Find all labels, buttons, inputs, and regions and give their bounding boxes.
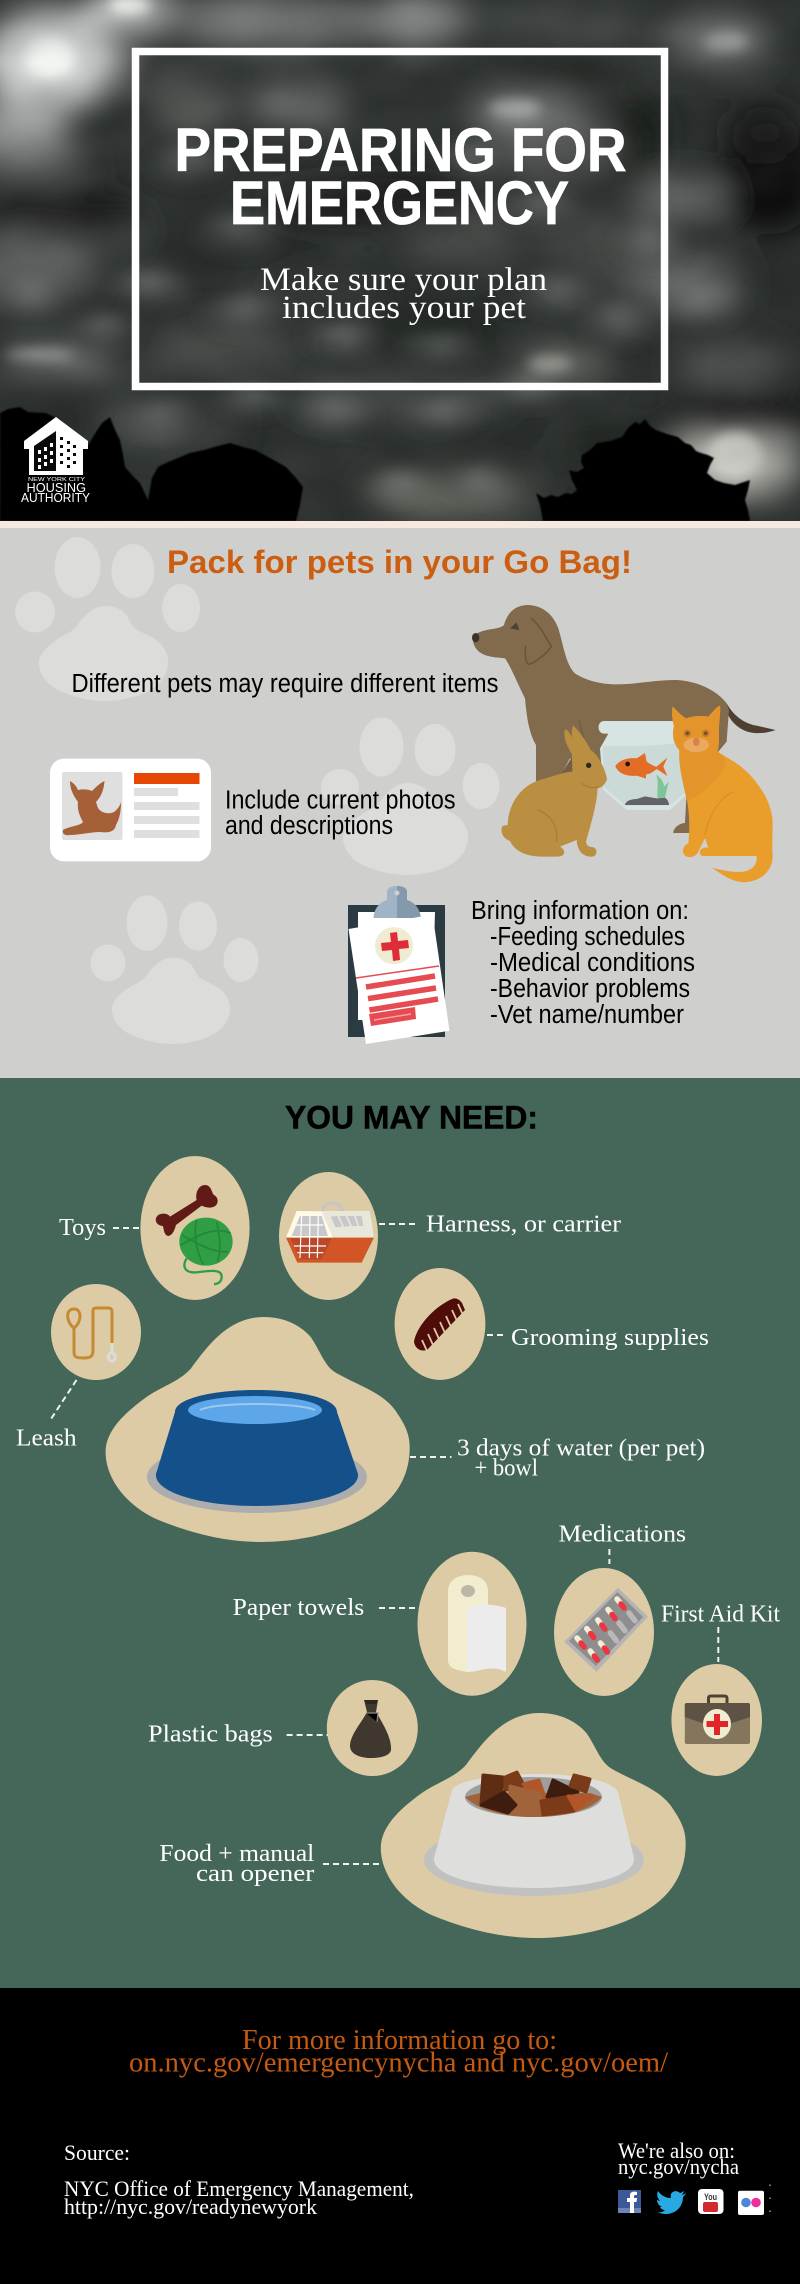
background paw 2	[321, 718, 500, 875]
icon: food bowl	[424, 1772, 644, 1896]
lower paw: plastic bags toe	[327, 1680, 418, 1776]
footer: more information: on.nyc.gov/emergencynycha and nyc.gov/oem/	[129, 2047, 669, 2079]
small dots beside icons	[769, 2184, 771, 2213]
dashed leader: first aid	[717, 1627, 719, 1662]
subtitle	[260, 262, 547, 326]
label: medications: Medications	[558, 1522, 686, 1548]
label: toys: Toys	[59, 1215, 106, 1241]
footer: also on: We're also on:	[618, 2138, 735, 2163]
icon: flickr	[738, 2191, 764, 2215]
dashed leader: toys	[113, 1227, 139, 1229]
dashed leader: leash	[51, 1380, 76, 1419]
tree silhouettes	[0, 407, 750, 521]
panel: you may need	[0, 1078, 800, 1988]
label: food: can opener	[196, 1861, 314, 1887]
icon: ball of yarn	[179, 1218, 233, 1284]
label: food: Food + manual	[159, 1841, 315, 1867]
logo: NYC Housing Authority: AUTHORITY	[21, 490, 90, 505]
text: different pets: Different pets may require different items	[72, 670, 498, 698]
title	[174, 116, 626, 237]
icon: blister pack	[564, 1588, 648, 1672]
dashed leader: paper towels	[379, 1607, 415, 1609]
icon: pet carrier	[286, 1203, 374, 1263]
label: water: + bowl	[474, 1456, 538, 1482]
text: current photos	[225, 786, 456, 840]
icon: facebook	[618, 2190, 641, 2213]
subtitle: includes your pet	[282, 290, 526, 326]
label: plastic bags: Plastic bags	[148, 1722, 273, 1748]
pale divider band	[0, 521, 800, 528]
dashed leader: food	[323, 1863, 379, 1865]
subtitle: Make sure your plan	[260, 262, 547, 298]
heading: you may need: YOU MAY NEED:	[285, 1100, 538, 1136]
logo: NYC Housing Authority	[21, 417, 90, 505]
footer: source: http://nyc.gov/readynewyork	[64, 2194, 317, 2219]
text: bring information: -Behavior problems	[490, 975, 690, 1003]
illustration: rabbit	[501, 726, 607, 857]
dashed leader: water	[410, 1456, 452, 1458]
logo: NYC Housing Authority: HOUSING	[26, 480, 86, 495]
label: leash: Leash	[16, 1426, 76, 1452]
text: bring information: Bring information on:	[471, 897, 689, 925]
footer: also on	[618, 2138, 739, 2179]
upper paw: carrier toe	[279, 1172, 378, 1300]
icon: comb	[414, 1298, 465, 1351]
lower paw: paper towels toe	[418, 1552, 526, 1696]
background paw 1	[15, 537, 200, 701]
lower paw pad with food bowl	[381, 1713, 686, 1938]
text: bring information: -Feeding schedules	[490, 923, 685, 951]
text: bring information: -Medical conditions	[490, 949, 695, 977]
panel: pack for pets	[0, 528, 800, 1078]
footer: source	[64, 2140, 414, 2219]
upper paw: toys toe	[140, 1156, 250, 1300]
illustration: cat	[672, 706, 773, 882]
title: EMERGENCY	[230, 169, 569, 237]
footer: source: NYC Office of Emergency Management,	[64, 2176, 414, 2201]
dashed leader: plastic bags	[287, 1734, 328, 1736]
lower paw: first aid toe	[671, 1664, 762, 1776]
icon: clipboard	[348, 886, 450, 1044]
upper paw pad with water bowl	[106, 1317, 410, 1542]
icon: bone	[156, 1185, 218, 1236]
dashed leader: medications	[608, 1549, 610, 1564]
illustration: fish bowl	[599, 721, 690, 810]
label: water: 3 days of water (per pet)	[457, 1436, 705, 1462]
title frame	[136, 52, 664, 386]
icon: first aid kit	[685, 1696, 750, 1744]
footer: also on: nyc.gov/nycha	[618, 2154, 739, 2179]
panel: footer	[0, 1988, 800, 2284]
hero storm-cloud photo panel	[0, 0, 800, 521]
dashed leader: carrier	[379, 1223, 417, 1225]
text: current photos: Include current photos	[225, 786, 456, 814]
label: grooming: Grooming supplies	[511, 1325, 709, 1351]
footer: more information: For more information go to:	[242, 2024, 557, 2056]
icon: youtube: You	[704, 2192, 717, 2202]
lower paw: medications toe	[554, 1568, 654, 1696]
background paw 3	[90, 895, 258, 1044]
logo: NYC Housing Authority: NEW YORK CITY	[28, 477, 85, 483]
illustration: dog	[472, 605, 776, 833]
label: water	[457, 1436, 705, 1482]
icon: twitter	[657, 2191, 686, 2214]
footer: more information	[129, 2024, 669, 2079]
text: bring information	[471, 897, 695, 1029]
label: first aid kit: First Aid Kit	[661, 1602, 780, 1628]
icon: water bowl	[147, 1390, 367, 1513]
dashed leader: grooming	[487, 1334, 506, 1336]
label: carrier: Harness, or carrier	[426, 1212, 621, 1238]
icon: plastic bag	[350, 1700, 391, 1758]
heading: pack for pets: Pack for pets in your Go Bag!	[167, 544, 632, 580]
text: bring information: -Vet name/number	[490, 1001, 684, 1029]
icon: leash	[68, 1308, 115, 1361]
upper paw: grooming toe	[395, 1268, 485, 1380]
text: current photos: and descriptions	[225, 812, 393, 840]
label: food	[159, 1841, 315, 1887]
upper paw: leash toe	[51, 1284, 141, 1380]
icon: youtube	[698, 2189, 724, 2214]
label: paper towels: Paper towels	[233, 1595, 364, 1621]
footer: source: Source:	[64, 2140, 130, 2165]
icon: paper towels	[448, 1575, 506, 1672]
icon: pet photo ID card	[50, 759, 211, 861]
title: PREPARING FOR	[174, 116, 626, 184]
